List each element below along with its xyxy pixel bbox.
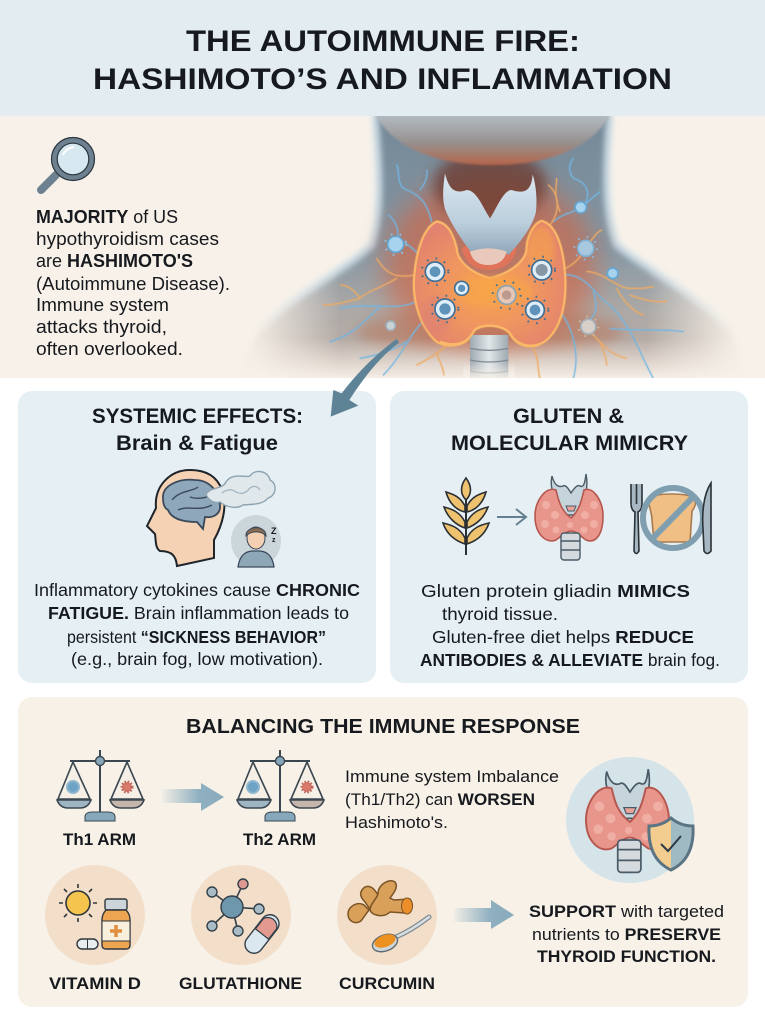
icon: head with foggy brain: z [272,537,276,544]
icon: curcumin root and spoon [337,865,437,965]
neck illustration [257,116,732,378]
label: Th2 arm: Th2 ARM [243,830,316,849]
text: immune imbalance: Hashimoto's. [345,813,448,832]
nerve branches blue [330,158,683,378]
title band [0,0,765,116]
heading: systemic effects: SYSTEMIC EFFECTS: [92,405,303,428]
title [93,25,672,96]
body text: gluten: Gluten-free diet helps REDUCE [432,627,694,647]
icon: head with foggy brain [147,470,281,567]
intro text block: often overlooked. [36,339,183,359]
icon: Th2 scale [237,750,324,821]
icon: thyroid [535,474,603,560]
arrow between scales [162,783,224,811]
text: support: nutrients to PRESERVE [532,925,721,944]
text: immune imbalance [345,767,559,832]
icon: protected thyroid [566,757,694,883]
intro text block: (Autoimmune Disease). [36,274,230,294]
text: support: SUPPORT with targeted [529,902,724,921]
heading: gluten: GLUTEN & [513,405,624,428]
panel: gluten and molecular mimicry [390,391,748,683]
icon: no gluten plate [631,483,711,554]
body text: systemic effects: (e.g., brain fog, low motivation). [71,649,323,669]
body text: gluten: Gluten protein gliadin MIMICS [421,581,690,601]
arrow to support text [454,900,514,929]
text: support: THYROID FUNCTION. [537,947,716,966]
heading: systemic effects: Brain & Fatigue [116,432,278,455]
body text: gluten [420,581,720,670]
icon: vitamin D [45,865,145,965]
icon: Th1 scale [57,750,144,821]
title: THE AUTOIMMUNE FIRE: [186,25,580,58]
label: glutathione: GLUTATHIONE [179,974,302,993]
heading: systemic effects [92,405,303,455]
heading: balancing: BALANCING THE IMMUNE RESPONSE [186,715,580,738]
icon: wheat [443,478,489,555]
text: immune imbalance: Immune system Imbalance [345,767,559,786]
body text: systemic effects [34,580,360,669]
intro text block: attacks thyroid, [36,317,167,337]
panel: balancing the immune response [18,697,748,1007]
body text: gluten: ANTIBODIES & ALLEVIATE brain fog. [420,650,720,670]
intro text block [36,207,230,359]
body text: gluten: thyroid tissue. [442,604,558,624]
icon: glutathione molecule and capsule [191,865,291,965]
hero panel: inflamed thyroid [0,115,765,382]
icon: head with foggy brain: Z [271,526,277,536]
intro text block: MAJORITY of US [36,207,178,227]
panel: systemic effects [18,391,376,683]
label: curcumin: CURCUMIN [339,974,435,993]
trachea [470,335,508,378]
thyroid gland [414,221,565,345]
body text: systemic effects: persistent “SICKNESS BEHAVIOR” [67,627,326,647]
heading: gluten [451,405,688,455]
label: Th1 arm: Th1 ARM [63,830,136,849]
text: support [529,902,724,966]
arrow from hero to systemic effects panel [331,339,399,417]
body text: systemic effects: Inflammatory cytokines cause CHRONIC [34,580,360,600]
heading: gluten: MOLECULAR MIMICRY [451,432,688,455]
intro text block: hypothyroidism cases [36,229,219,249]
icon: arrow wheat to thyroid [497,509,526,525]
text: immune imbalance: (Th1/Th2) can WORSEN [345,790,535,809]
intro text block: are HASHIMOTO'S [36,251,193,271]
cartilage [462,246,516,270]
immune cells [385,202,618,337]
title: HASHIMOTO’S AND INFLAMMATION [93,63,672,96]
label: vitamin D: VITAMIN D [49,974,141,993]
icon: magnifying glass [41,138,94,190]
intro text block: Immune system [36,295,169,315]
body text: systemic effects: FATIGUE. Brain inflammation leads to [48,603,349,623]
nerve branches orange [323,178,667,378]
